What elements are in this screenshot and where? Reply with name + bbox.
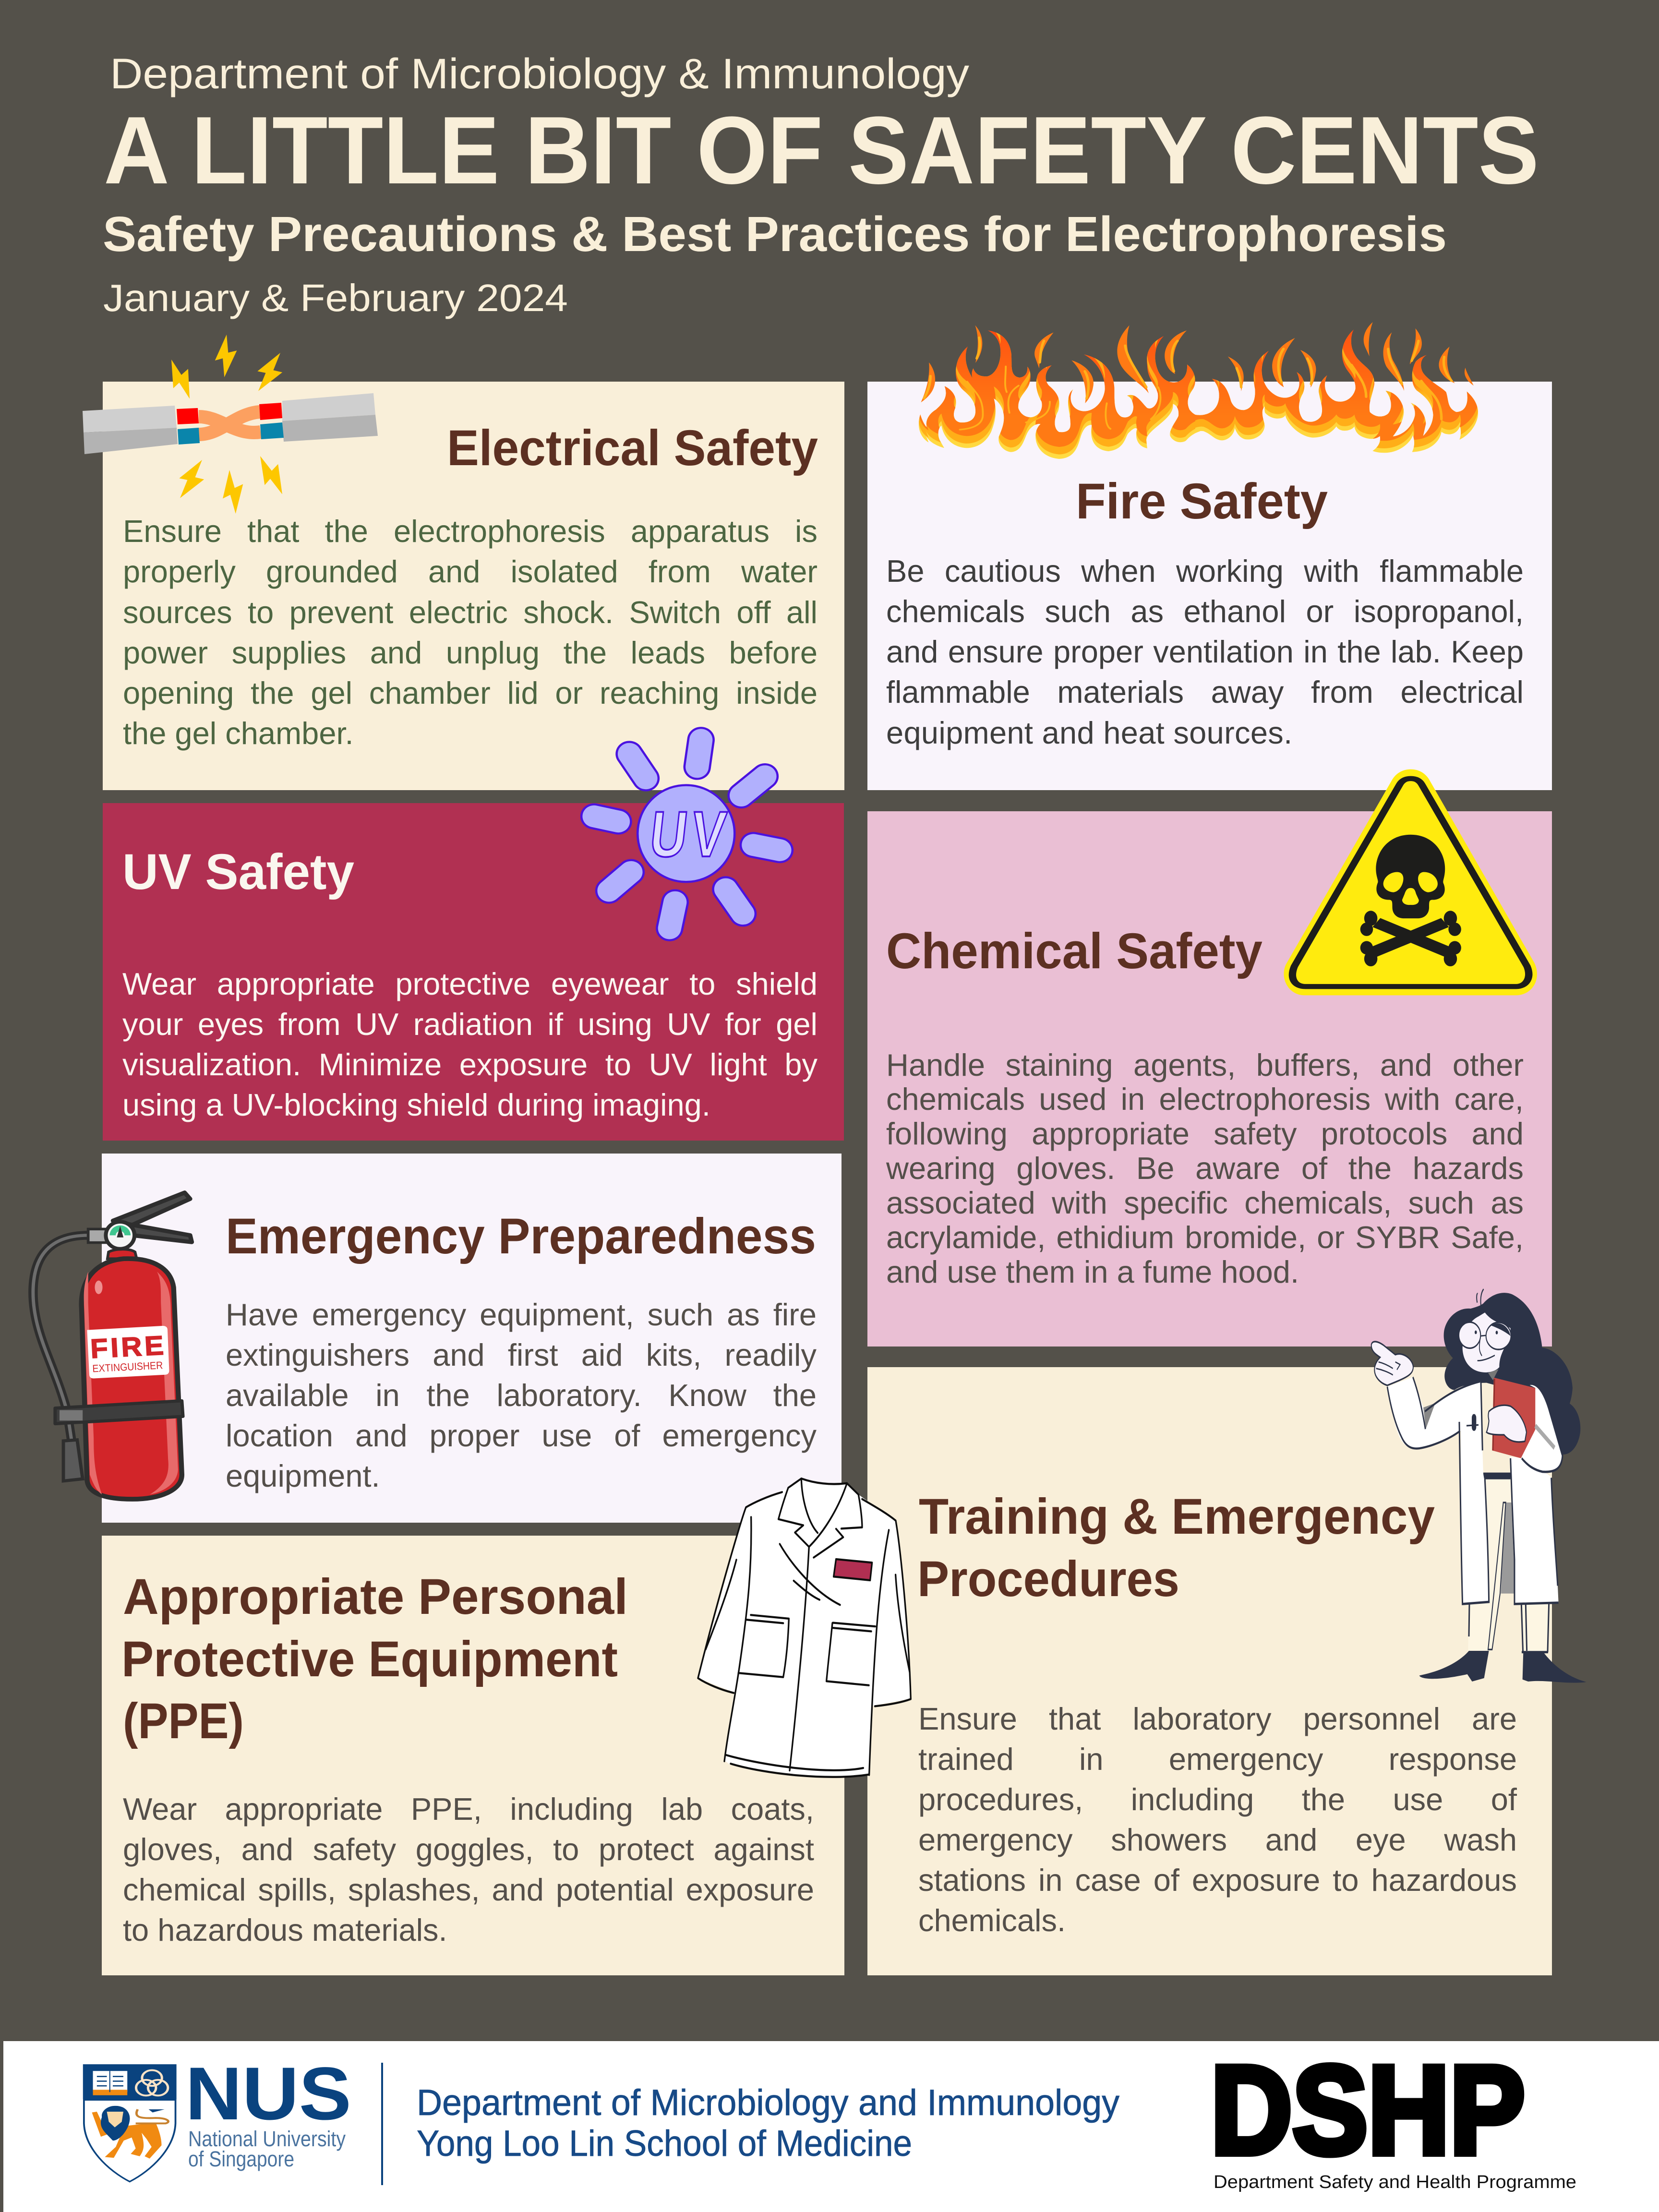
text: fire safety body: equipment and heat sources.: [886, 715, 1292, 750]
text: emergency preparedness body: [226, 1297, 817, 1493]
icon: poison warning sign with skull: [1277, 766, 1546, 1001]
title: A LITTLE BIT OF SAFETY CENTS: [104, 97, 1539, 204]
heading: appropriate PPE: (PPE): [123, 1693, 244, 1749]
logo: NUS wordmark: [185, 2052, 351, 2171]
logo: NUS wordmark: NUS: [185, 2052, 351, 2136]
text: department and school: Yong Loo Lin School of Medicine: [417, 2123, 912, 2164]
icon: UV sun: UV: [647, 798, 734, 870]
text: electrical safety body: the gel chamber.: [123, 716, 354, 751]
heading: emergency preparedness: Emergency Preparedness: [226, 1208, 816, 1264]
text: electrical safety body: properly grounded and isolated from water: [123, 554, 817, 589]
text: training body: emergency showers and eye wash: [918, 1822, 1517, 1857]
footer: [3, 2041, 1659, 2212]
icon: lab coat: [694, 1474, 924, 1781]
icon: scientist pointing: [1368, 1286, 1589, 1690]
text: chemical safety body: Handle staining agents, buffers, and other: [886, 1047, 1524, 1082]
icon: fire extinguisher: EXTINGUISHER: [92, 1359, 163, 1374]
text: UV safety body: Wear appropriate protective eyewear to shield: [122, 966, 817, 1001]
text: UV safety body: [122, 966, 817, 1122]
text: department and school: Department of Microbiology and Immunology: [417, 2082, 1119, 2123]
text: emergency preparedness body: equipment.: [226, 1458, 380, 1493]
logo: NUS wordmark: National University: [188, 2127, 346, 2151]
text: electrical safety body: opening the gel chamber lid or reaching inside: [123, 675, 817, 710]
text: emergency preparedness body: location and proper use of emergency: [226, 1418, 817, 1453]
text: training body: chemicals.: [918, 1903, 1066, 1937]
text: UV safety body: your eyes from UV radiation if using UV for gel: [122, 1006, 817, 1042]
text: UV safety body: visualization. Minimize exposure to UV light by: [122, 1046, 817, 1082]
text: fire safety body: flammable materials away from electrical: [886, 674, 1524, 709]
text: PPE body: [123, 1791, 814, 1947]
panel: emergency preparedness: [102, 1154, 842, 1523]
panel: fire safety: [867, 382, 1552, 790]
text: fire safety body: chemicals such as ethanol or isopropanol,: [886, 594, 1524, 629]
panel: personal protective equipment: [102, 1536, 844, 1975]
heading: appropriate PPE: [121, 1569, 628, 1749]
date: January & February 2024: [103, 276, 568, 319]
text: PPE body: gloves, and safety goggles, to protect against: [123, 1832, 814, 1866]
heading: training and emergency procedures: Training & Emergency: [919, 1489, 1435, 1545]
heading: appropriate PPE: Appropriate Personal: [123, 1569, 628, 1625]
text: PPE body: to hazardous materials.: [123, 1912, 447, 1947]
text: training body: stations in case of exposure to hazardous: [918, 1863, 1517, 1897]
text: fire safety body: and ensure proper ventilation in the lab. Keep: [886, 634, 1524, 669]
text: electrical safety body: sources to prevent electric shock. Switch off all: [123, 595, 817, 630]
logo: DSHP: Department Safety and Health Programme: [1214, 2172, 1576, 2192]
panel: UV safety: [103, 803, 844, 1141]
icon: fire extinguisher: [24, 1186, 202, 1507]
heading: UV safety: UV Safety: [122, 844, 354, 900]
heading: training and emergency procedures: [919, 1486, 1435, 1615]
text: chemical safety body: acrylamide, ethidium bromide, or SYBR Safe,: [886, 1220, 1524, 1255]
header: department line: Department of Microbiology & Immunology: [110, 49, 970, 97]
logo: NUS wordmark: of Singapore: [188, 2147, 294, 2171]
text: electrical safety body: Ensure that the electrophoresis apparatus is: [123, 514, 817, 549]
heading: fire safety: Fire Safety: [1076, 473, 1328, 529]
text: fire safety body: Be cautious when working with flammable: [886, 553, 1524, 589]
text: training body: procedures, including the use of: [918, 1782, 1517, 1816]
text: electrical safety body: [123, 514, 817, 751]
heading: training and emergency procedures: Procedures: [917, 1551, 1179, 1607]
icon: UV sun: [571, 722, 806, 948]
text: emergency preparedness body: Have emergency equipment, such as fire: [226, 1297, 817, 1332]
heading: chemical safety: Chemical Safety: [886, 923, 1262, 979]
icon: flames: [919, 322, 1479, 459]
text: electrical safety body: power supplies and unplug the leads before: [123, 635, 817, 670]
icon: frayed electric wire with sparks: [79, 331, 382, 516]
logo: NUS crest: [83, 2064, 177, 2182]
text: UV safety body: using a UV-blocking shield during imaging.: [122, 1087, 710, 1122]
text: chemical safety body: chemicals used in electrophoresis with care,: [886, 1082, 1524, 1117]
icon: fire extinguisher: FIRE: [90, 1330, 165, 1364]
text: chemical safety body: associated with specific chemicals, such as: [886, 1185, 1524, 1220]
text: chemical safety body: and use them in a fume hood.: [886, 1254, 1299, 1289]
text: emergency preparedness body: available in the laboratory. Know the: [226, 1378, 817, 1412]
text: chemical safety body: following appropriate safety protocols and: [886, 1116, 1524, 1151]
text: chemical safety body: wearing gloves. Be aware of the hazards: [886, 1151, 1524, 1186]
text: emergency preparedness body: extinguishers and first aid kits, readily: [226, 1337, 817, 1372]
panel: training and emergency procedures: [867, 1367, 1552, 1975]
text: training body: Ensure that laboratory personnel are: [918, 1701, 1517, 1736]
text: chemical safety body: [886, 1047, 1524, 1289]
heading: appropriate PPE: Protective Equipment: [121, 1631, 618, 1687]
text: PPE body: Wear appropriate PPE, including lab coats,: [123, 1791, 814, 1826]
panel: electrical safety: [103, 382, 844, 790]
logo: DSHP: DSHP: [1211, 2040, 1525, 2180]
heading: electrical safety: Electrical Safety: [447, 420, 818, 476]
text: training body: [918, 1698, 1517, 1940]
panel: chemical safety: [867, 811, 1552, 1346]
text: training body: trained in emergency response: [918, 1742, 1517, 1776]
subtitle: Safety Precautions & Best Practices for Electrophoresis: [103, 206, 1447, 262]
text: department and school: [417, 2082, 1119, 2164]
text: PPE body: chemical spills, splashes, and potential exposure: [123, 1872, 814, 1907]
text: fire safety body: [886, 553, 1524, 750]
